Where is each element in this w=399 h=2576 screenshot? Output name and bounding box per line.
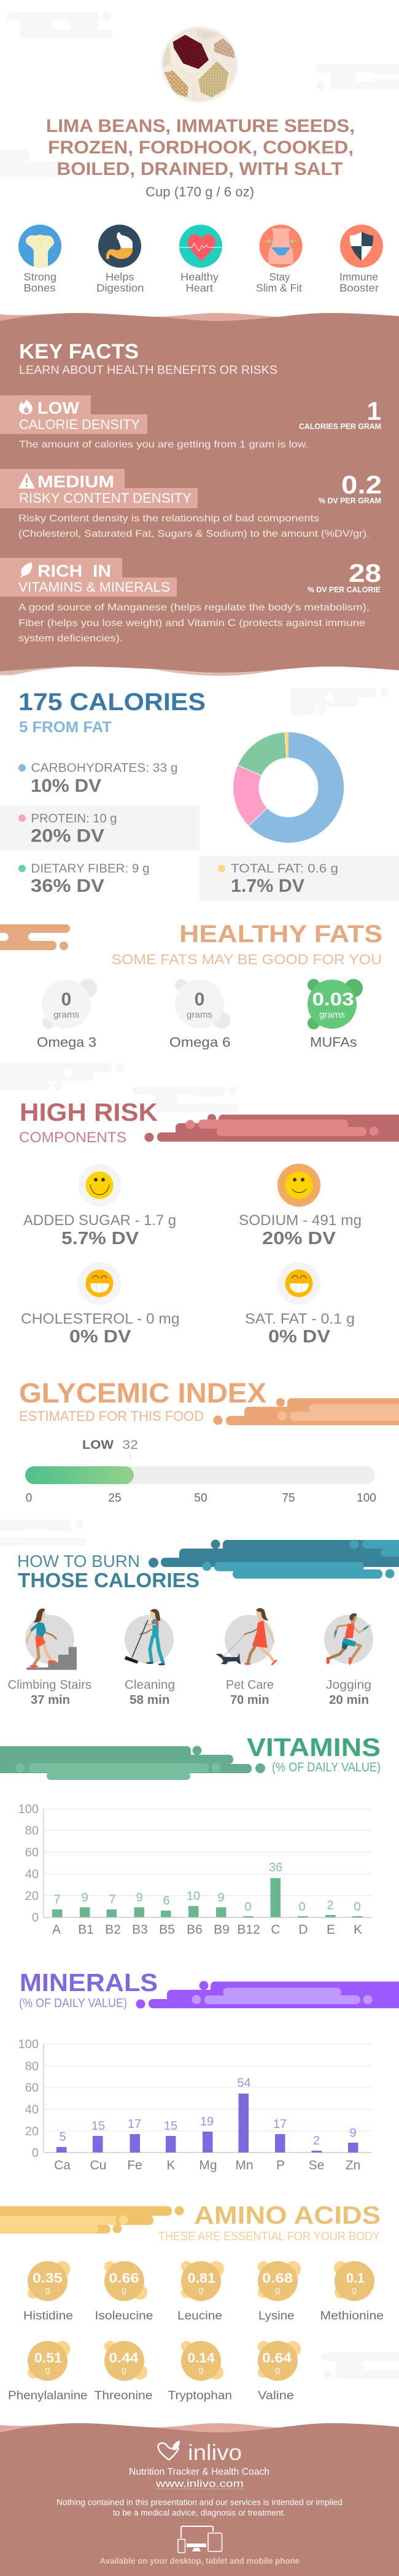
climbing stairs label: 37 min — [31, 1693, 70, 1707]
icon: strong bones — [18, 225, 61, 268]
amino: phenylalanine — [8, 2341, 87, 2402]
bar chart: vitamins: C — [271, 1922, 281, 1937]
availability note: Available on your desktop, tablet and mobile phone — [99, 2556, 300, 2566]
benefit labels: Stay — [269, 271, 290, 283]
glycemic index gauge: 25 — [108, 1491, 122, 1505]
subheading: amino acids: THESE ARE ESSENTIAL FOR YOUR BODY — [158, 2230, 380, 2243]
pet care label: Pet Care — [226, 1678, 274, 1692]
bar chart: vitamins: 0 — [244, 1900, 252, 1914]
background decoration: amino cloud — [322, 2353, 399, 2378]
benefit labels — [23, 271, 379, 294]
fact: medium risky content density: 0.2 — [341, 470, 382, 499]
amino: threonine — [95, 2341, 152, 2402]
glycemic index gauge: 0 — [26, 1491, 32, 1505]
subheading: key facts: LEARN ABOUT HEALTH BENEFITS OR RISKS — [19, 364, 277, 377]
amino: methionine — [320, 2261, 384, 2323]
bar chart: vitamins: E — [327, 1922, 335, 1937]
bar chart: minerals: Se — [309, 2158, 324, 2173]
amino: tryptophan — [168, 2341, 232, 2402]
bar chart: vitamins: 36 — [269, 1861, 282, 1874]
section banner: healthy fats — [0, 921, 382, 967]
bar chart: vitamins: 7 — [109, 1893, 116, 1906]
heading: high risk: HIGH RISK — [20, 1098, 158, 1126]
section banner: high risk — [19, 1098, 399, 1146]
fact: rich in vitamins and minerals: A good source of Manganese (helps regulate the body’s metabolism), — [18, 603, 370, 613]
pet care label — [226, 1678, 274, 1707]
bar chart: minerals — [18, 2038, 371, 2173]
bar chart: vitamins: D — [298, 1922, 308, 1937]
disclaimer — [56, 2498, 343, 2518]
amino: threonine: g — [122, 2365, 126, 2375]
fats: omega 3: Omega 3 — [37, 1035, 96, 1050]
risk: cholesterol: 0% DV — [69, 1327, 131, 1347]
amino: leucine: g — [198, 2285, 204, 2296]
fats: omega 6 — [169, 979, 231, 1050]
bar chart: minerals: Zn — [346, 2158, 360, 2173]
bar chart: minerals: 60 — [25, 2081, 39, 2095]
benefit labels: Strong — [23, 271, 56, 283]
icon: slim and fit waist — [259, 225, 302, 268]
bar chart: minerals: Mn — [235, 2158, 254, 2173]
bar chart: minerals: Mg — [199, 2158, 217, 2173]
subheading: components: COMPONENTS — [19, 1129, 126, 1146]
activity: climbing stairs — [7, 1609, 91, 1707]
fact: rich in vitamins and minerals: system deficiencies). — [18, 633, 123, 644]
cleaning label — [125, 1678, 175, 1707]
amino: valine — [258, 2341, 301, 2402]
heading: how to burn: HOW TO BURN — [17, 1552, 140, 1571]
bar chart: vitamins — [18, 1803, 371, 1937]
benefit labels: Helps — [106, 271, 134, 283]
activity: cleaning — [125, 1609, 175, 1707]
heading: those calories: THOSE CALORIES — [18, 1569, 200, 1592]
bar chart: vitamins: B6 — [187, 1922, 203, 1937]
bar chart: minerals: 17 — [128, 2118, 141, 2131]
bar chart: minerals: 40 — [25, 2103, 39, 2116]
risk: sodium: SODIUM - 491 mg — [239, 1212, 362, 1229]
fact: rich in vitamins and minerals: Fiber (helps you lose weight) and Vitamin C (protects against immune — [18, 618, 365, 629]
bar chart: minerals: 100 — [18, 2038, 39, 2051]
bar chart: vitamins: B9 — [214, 1922, 230, 1937]
background decoration: calories cloud — [290, 688, 389, 715]
bar chart: minerals: 20 — [25, 2125, 39, 2138]
heading: glycemic index: GLYCEMIC INDEX — [19, 1377, 266, 1409]
protein item: PROTEIN: 10 g — [31, 812, 117, 826]
bar chart: vitamins: B12 — [237, 1922, 260, 1937]
fact: medium risky content density: % DV PER GRAM — [319, 497, 381, 505]
dietary fiber item: DIETARY FIBER: 9 g — [31, 862, 150, 875]
carbohydrates item: 10% DV — [31, 776, 101, 796]
section banner: amino acids — [0, 2201, 381, 2243]
amino: threonine: 0.44 — [109, 2350, 139, 2365]
activity: pet care — [215, 1608, 276, 1707]
amino: phenylalanine: Phenylalanine — [8, 2389, 87, 2402]
bar chart: minerals: 2 — [313, 2134, 320, 2148]
carbohydrates item: CARBOHYDRATES: 33 g — [31, 761, 178, 775]
subheading: healthy fats: SOME FATS MAY BE GOOD FOR YOU — [112, 951, 382, 967]
fats: mufas: grams — [319, 1010, 345, 1020]
bar chart: vitamins: 0 — [298, 1900, 306, 1914]
risk: added sugar: ADDED SUGAR - 1.7 g — [23, 1212, 176, 1229]
glycemic index gauge: 50 — [194, 1491, 207, 1505]
section banner: glycemic index — [19, 1377, 399, 1425]
amino: methionine: g — [352, 2285, 357, 2296]
risk: added sugar — [23, 1164, 176, 1248]
bar chart: vitamins: 20 — [25, 1889, 39, 1903]
amino: valine: 0.64 — [262, 2350, 292, 2365]
fats: omega 6: 0 — [195, 989, 204, 1010]
bar chart: vitamins: 9 — [81, 1891, 88, 1905]
bar chart: minerals: Ca — [54, 2158, 71, 2173]
icon: healthy heart — [179, 225, 222, 268]
heading: 175 calories: 175 CALORIES — [18, 689, 206, 716]
bar chart: minerals: 15 — [91, 2119, 105, 2133]
title: BOILED, DRAINED, WITH SALT — [56, 159, 343, 179]
amino: leucine: Leucine — [177, 2310, 222, 2323]
activity: jogging — [324, 1613, 373, 1707]
fact: medium risky content density: RISKY CONTENT DENSITY — [19, 490, 192, 506]
glycemic index gauge: LOW — [82, 1439, 114, 1452]
amino: valine: Valine — [258, 2389, 294, 2402]
bar chart: vitamins: 0 — [354, 1900, 361, 1914]
heading: vitamins: VITAMINS — [247, 1733, 381, 1762]
background decoration: burn calories cloud — [0, 1520, 86, 1546]
icon: devices — [178, 2526, 222, 2553]
amino acids grid — [8, 2261, 384, 2402]
fact: medium risky content density: (Cholesterol, Saturated Fat, Sugars & Sodium) to the amount (%DV/gr). — [18, 529, 370, 539]
amino: histidine — [23, 2261, 73, 2323]
amino: valine: g — [275, 2365, 280, 2375]
benefit icons row — [18, 225, 383, 294]
risk: saturated fat: 0% DV — [268, 1327, 331, 1347]
section banner: minerals — [19, 1968, 399, 2010]
amino: tryptophan: 0.14 — [188, 2350, 215, 2365]
amino: lysine — [258, 2261, 301, 2323]
amino: isoleucine — [95, 2261, 153, 2323]
glycemic index gauge: 100 — [357, 1491, 376, 1505]
bar chart: vitamins: B3 — [132, 1922, 148, 1937]
fact: low calorie density: The amount of calories you are getting from 1 gram is low. — [19, 439, 308, 450]
carbohydrates item — [18, 761, 178, 796]
amino: isoleucine: Isoleucine — [95, 2310, 153, 2323]
food photo: beans in sacks — [161, 26, 238, 103]
fats: omega 3 — [37, 979, 97, 1050]
bar chart: vitamins: 10 — [187, 1889, 200, 1903]
amino: lysine: Lysine — [258, 2310, 295, 2323]
background decoration: top clouds — [0, 12, 399, 177]
bar chart: minerals: 17 — [273, 2118, 287, 2131]
risk: sodium: 20% DV — [262, 1229, 336, 1248]
fact: low calorie density: LOW — [37, 398, 80, 417]
protein item: 20% DV — [31, 826, 104, 846]
title: LIMA BEANS, IMMATURE SEEDS, — [46, 116, 355, 136]
bar chart: vitamins: 0 — [32, 1911, 39, 1925]
section banner: how to burn — [17, 1539, 399, 1592]
panel: key facts — [0, 313, 399, 676]
benefit labels: Heart — [185, 282, 213, 294]
bar chart: vitamins: B5 — [159, 1922, 175, 1937]
subheading: estimated: ESTIMATED FOR THIS FOOD — [19, 1408, 204, 1424]
amino: histidine: 0.35 — [33, 2270, 63, 2286]
section banner: vitamins — [0, 1733, 381, 1780]
amino: leucine — [177, 2261, 224, 2323]
fact: low calorie density: CALORIE DENSITY — [19, 417, 140, 432]
heading: healthy fats: HEALTHY FATS — [179, 921, 382, 948]
fats: mufas — [308, 979, 363, 1050]
amino: lysine: g — [275, 2285, 280, 2296]
risk: sodium — [239, 1164, 362, 1248]
serving size: Cup (170 g / 6 oz) — [145, 184, 254, 199]
bar chart: minerals: 9 — [349, 2126, 357, 2140]
fact: rich in vitamins and minerals: VITAMINS & MINERALS — [18, 579, 170, 595]
risk: added sugar: 5.7% DV — [61, 1229, 139, 1248]
title — [46, 116, 355, 179]
bar chart: vitamins: K — [354, 1922, 362, 1937]
bar chart: minerals: 80 — [25, 2060, 39, 2073]
fact: rich in vitamins and minerals — [0, 558, 381, 644]
subheading: vitamins: (% OF DAILY VALUE) — [272, 1760, 381, 1774]
dietary fiber item: 36% DV — [31, 876, 104, 896]
fact: medium risky content density — [0, 469, 382, 539]
website: www.inlivo.com — [155, 2478, 244, 2489]
fats: omega 6: Omega 6 — [169, 1035, 231, 1050]
amino: methionine: 0.1 — [346, 2270, 365, 2286]
glycemic index gauge: 32 — [122, 1439, 138, 1452]
jogging label — [326, 1678, 371, 1707]
bar chart: vitamins: A — [52, 1922, 61, 1937]
dietary fiber item — [18, 862, 150, 896]
benefit labels: Immune — [339, 271, 378, 283]
amino: threonine: Threonine — [95, 2389, 152, 2402]
benefit labels: Digestion — [96, 282, 144, 294]
risk: cholesterol — [21, 1262, 179, 1347]
bar chart: minerals: Cu — [90, 2158, 106, 2173]
fact: low calorie density: CALORIES PER GRAM — [299, 422, 381, 431]
tagline: Nutrition Tracker & Health Coach — [129, 2467, 269, 2477]
fats: mufas: 0.03 — [312, 989, 354, 1010]
amino: phenylalanine: 0.51 — [34, 2350, 62, 2365]
amino: methionine: Methionine — [320, 2310, 384, 2323]
pet care label: 70 min — [230, 1693, 269, 1707]
bar chart: vitamins: 40 — [25, 1868, 39, 1881]
protein item — [18, 812, 117, 846]
disclaimer: to be a medical advice, diagnosis or treatment. — [113, 2508, 285, 2518]
fact: rich in vitamins and minerals: % DV PER CALORIE — [308, 586, 381, 594]
bar chart: vitamins: 9 — [217, 1891, 225, 1905]
bar chart: vitamins: 2 — [327, 1899, 334, 1913]
amino: histidine: Histidine — [23, 2310, 73, 2323]
bar chart: vitamins: 7 — [53, 1893, 61, 1906]
total fat item — [218, 862, 338, 896]
bar chart: vitamins: 9 — [136, 1891, 143, 1905]
total fat item: TOTAL FAT: 0.6 g — [231, 862, 338, 875]
fact: low calorie density — [0, 395, 381, 450]
bar chart: minerals: K — [166, 2158, 176, 2173]
donut chart: calorie sources — [233, 732, 344, 843]
benefit labels: Slim & Fit — [256, 282, 302, 294]
glycemic index gauge: 75 — [282, 1491, 295, 1505]
logo: inlivo — [158, 2440, 242, 2465]
fact: medium risky content density: MEDIUM — [37, 472, 114, 491]
bar chart: vitamins: B2 — [105, 1922, 121, 1937]
amino: isoleucine: 0.66 — [109, 2270, 139, 2286]
legend: macronutrients — [0, 761, 399, 901]
bar chart: vitamins: 6 — [163, 1894, 170, 1908]
bar chart: vitamins: 60 — [25, 1846, 39, 1860]
bar chart: minerals: 19 — [200, 2115, 214, 2129]
icon: immune shield — [340, 225, 383, 268]
amino: tryptophan: g — [198, 2365, 204, 2375]
bar chart: minerals: 0 — [32, 2146, 39, 2160]
amino: phenylalanine: g — [45, 2365, 50, 2375]
fats: omega 3: 0 — [61, 989, 71, 1010]
risk: cholesterol: CHOLESTEROL - 0 mg — [21, 1311, 179, 1327]
total fat item: 1.7% DV — [231, 876, 304, 896]
heading: minerals: MINERALS — [20, 1968, 158, 1997]
jogging label: Jogging — [326, 1678, 371, 1692]
amino: isoleucine: g — [122, 2285, 126, 2296]
bar chart: minerals: Fe — [127, 2158, 142, 2173]
fact: rich in vitamins and minerals: 28 — [349, 559, 381, 587]
panel: footer — [0, 2423, 399, 2576]
amino: lysine: 0.68 — [262, 2270, 293, 2286]
bar chart: minerals: 5 — [59, 2130, 66, 2144]
title: FROZEN, FORDHOOK, COOKED, — [48, 137, 354, 158]
benefit labels: Booster — [339, 282, 379, 294]
subheading: from fat: 5 FROM FAT — [19, 719, 112, 736]
bar chart: vitamins: 100 — [18, 1803, 39, 1816]
cleaning label: Cleaning — [125, 1678, 175, 1692]
glycemic index gauge — [25, 1439, 376, 1505]
risk: saturated fat: SAT. FAT - 0.1 g — [245, 1311, 355, 1327]
bar chart: minerals: 54 — [237, 2076, 251, 2090]
cleaning label: 58 min — [130, 1693, 169, 1707]
bar chart: vitamins: B1 — [78, 1922, 94, 1937]
climbing stairs label: Climbing Stairs — [7, 1678, 91, 1692]
amino: tryptophan: Tryptophan — [168, 2389, 232, 2402]
amino: histidine: g — [45, 2285, 50, 2296]
fact: rich in vitamins and minerals: RICH IN — [37, 561, 111, 581]
benefit labels: Healthy — [180, 271, 219, 283]
subheading: minerals: (% OF DAILY VALUE) — [19, 1997, 127, 2010]
heading: amino acids: AMINO ACIDS — [194, 2201, 381, 2229]
disclaimer: Nothing contained in this presentation and our services is intended or implied — [56, 2498, 343, 2507]
background decoration: high risk clouds — [0, 1063, 239, 1112]
risk: saturated fat — [245, 1262, 355, 1347]
fact: medium risky content density: Risky Content density is the relationship of bad components — [18, 513, 319, 524]
heading: key facts: KEY FACTS — [19, 340, 139, 363]
bar chart: minerals: P — [276, 2158, 285, 2173]
fats: omega 3: grams — [53, 1010, 79, 1020]
amino: leucine: 0.81 — [188, 2270, 215, 2286]
benefit labels: Bones — [23, 282, 56, 294]
fats: omega 6: grams — [187, 1010, 212, 1020]
logo: inlivo: inlivo — [188, 2440, 242, 2465]
jogging label: 20 min — [329, 1693, 369, 1707]
fats: mufas: MUFAs — [310, 1035, 357, 1050]
fact: low calorie density: 1 — [367, 396, 381, 425]
bar chart: minerals: 15 — [164, 2119, 177, 2133]
bar chart: vitamins: 80 — [25, 1824, 39, 1838]
climbing stairs label — [7, 1678, 91, 1707]
icon: digestion stomach — [98, 225, 141, 268]
